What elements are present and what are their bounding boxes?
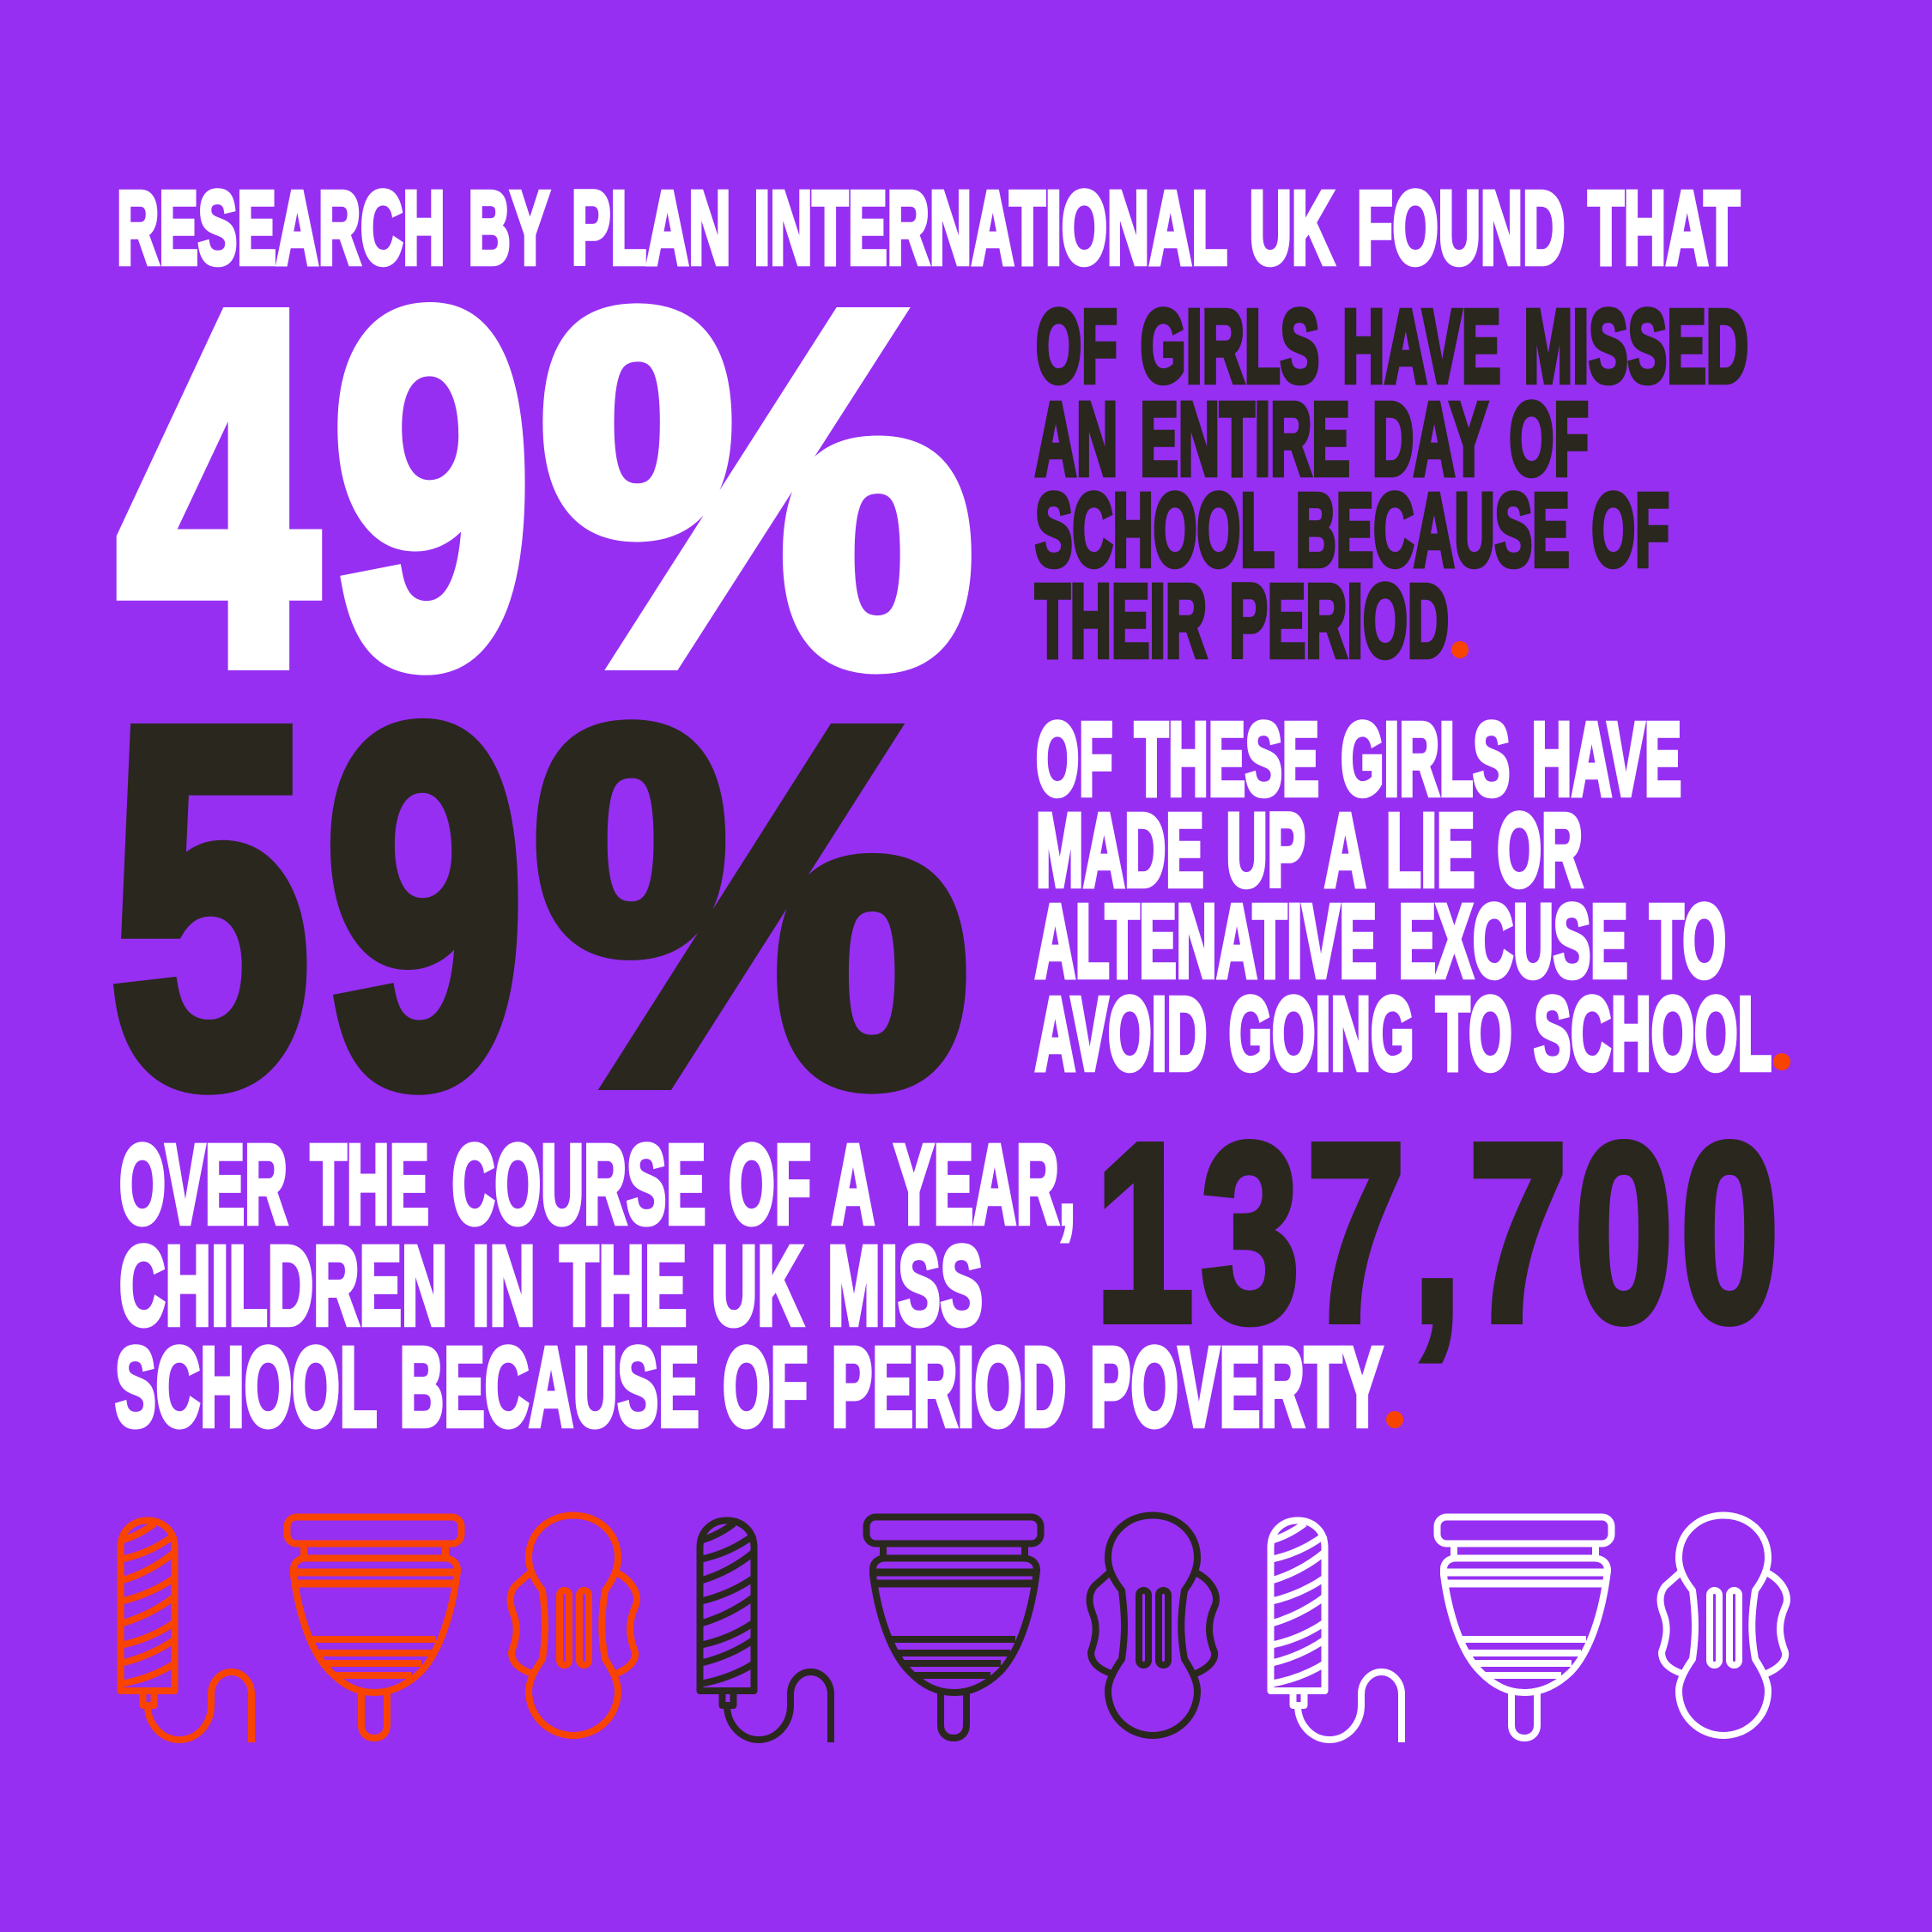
statistic: 59%: 59 <box>111 626 540 1187</box>
text block: over the course of a year <box>115 1121 1383 1450</box>
statistic: 49% <box>118 209 974 766</box>
icon: dark tampon <box>700 1521 831 1742</box>
text block: 49% description: THEIR PERIOD <box>1035 562 1449 679</box>
text block: over the course of a year: CHILDREN IN THE UK MISS <box>119 1222 983 1348</box>
icon: white menstrual cup <box>1437 1517 1612 1738</box>
icon row <box>120 1516 1787 1742</box>
icon: dark menstrual cup <box>867 1517 1040 1738</box>
icon: orange menstrual cup <box>287 1517 462 1738</box>
full stop dot <box>1773 1053 1790 1070</box>
statistic: 49%: % <box>541 209 974 766</box>
full stop dot <box>1451 641 1469 658</box>
text block: 59% description <box>1035 700 1772 1092</box>
icon: white sanitary pad <box>1660 1516 1787 1735</box>
icon: orange tampon <box>120 1521 251 1742</box>
full stop dot <box>1386 1411 1403 1428</box>
statistic: 59%: % <box>534 626 969 1187</box>
statistic: 49%: 49 <box>118 209 547 766</box>
text block: 49% description <box>1035 288 1748 679</box>
text block: over the course of a year: OVER THE COURSE OF A YEAR, <box>119 1121 1075 1247</box>
icon: dark sanitary pad <box>1090 1516 1216 1735</box>
icon: orange sanitary pad <box>510 1516 637 1735</box>
icon: white tampon <box>1270 1521 1402 1742</box>
